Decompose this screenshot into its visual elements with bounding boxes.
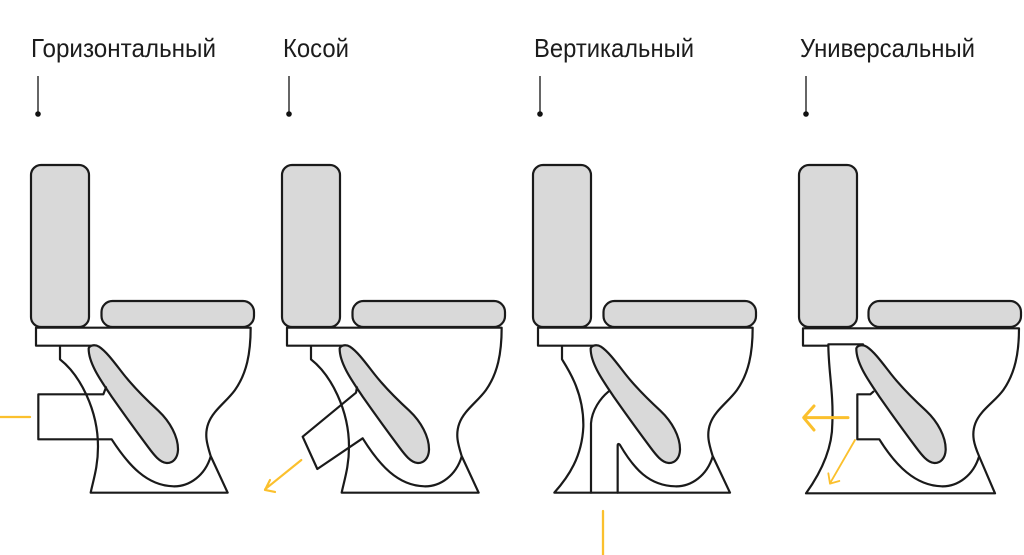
label: vertical: Вертикальный	[534, 33, 694, 63]
outlet arrow	[602, 511, 604, 555]
cistern	[533, 165, 591, 327]
outlet arrow	[0, 416, 30, 418]
label: horizontal: Горизонтальный	[31, 33, 216, 63]
cistern	[282, 165, 340, 327]
bowl outline	[803, 328, 1019, 493]
seat	[604, 301, 756, 327]
seat	[102, 301, 254, 327]
bowl outline	[538, 328, 753, 493]
label: universal: Универсальный	[800, 33, 975, 63]
bowl outline	[287, 328, 502, 493]
pointer: horizontal	[35, 76, 41, 117]
pointer: vertical	[537, 76, 543, 117]
outlet arrow	[265, 460, 301, 492]
pointer: oblique	[286, 76, 292, 117]
toilet: oblique outlet	[265, 165, 505, 493]
pointer: universal	[803, 76, 809, 117]
seat	[868, 301, 1021, 327]
toilet: vertical outlet	[533, 165, 756, 555]
cistern	[799, 165, 857, 327]
outlet arrows	[804, 406, 855, 484]
toilet: horizontal outlet	[0, 165, 254, 493]
bowl outline	[36, 328, 251, 493]
toilet: universal outlet	[799, 165, 1021, 493]
label: oblique: Косой	[283, 33, 349, 63]
seat	[352, 301, 505, 327]
cistern	[31, 165, 89, 327]
